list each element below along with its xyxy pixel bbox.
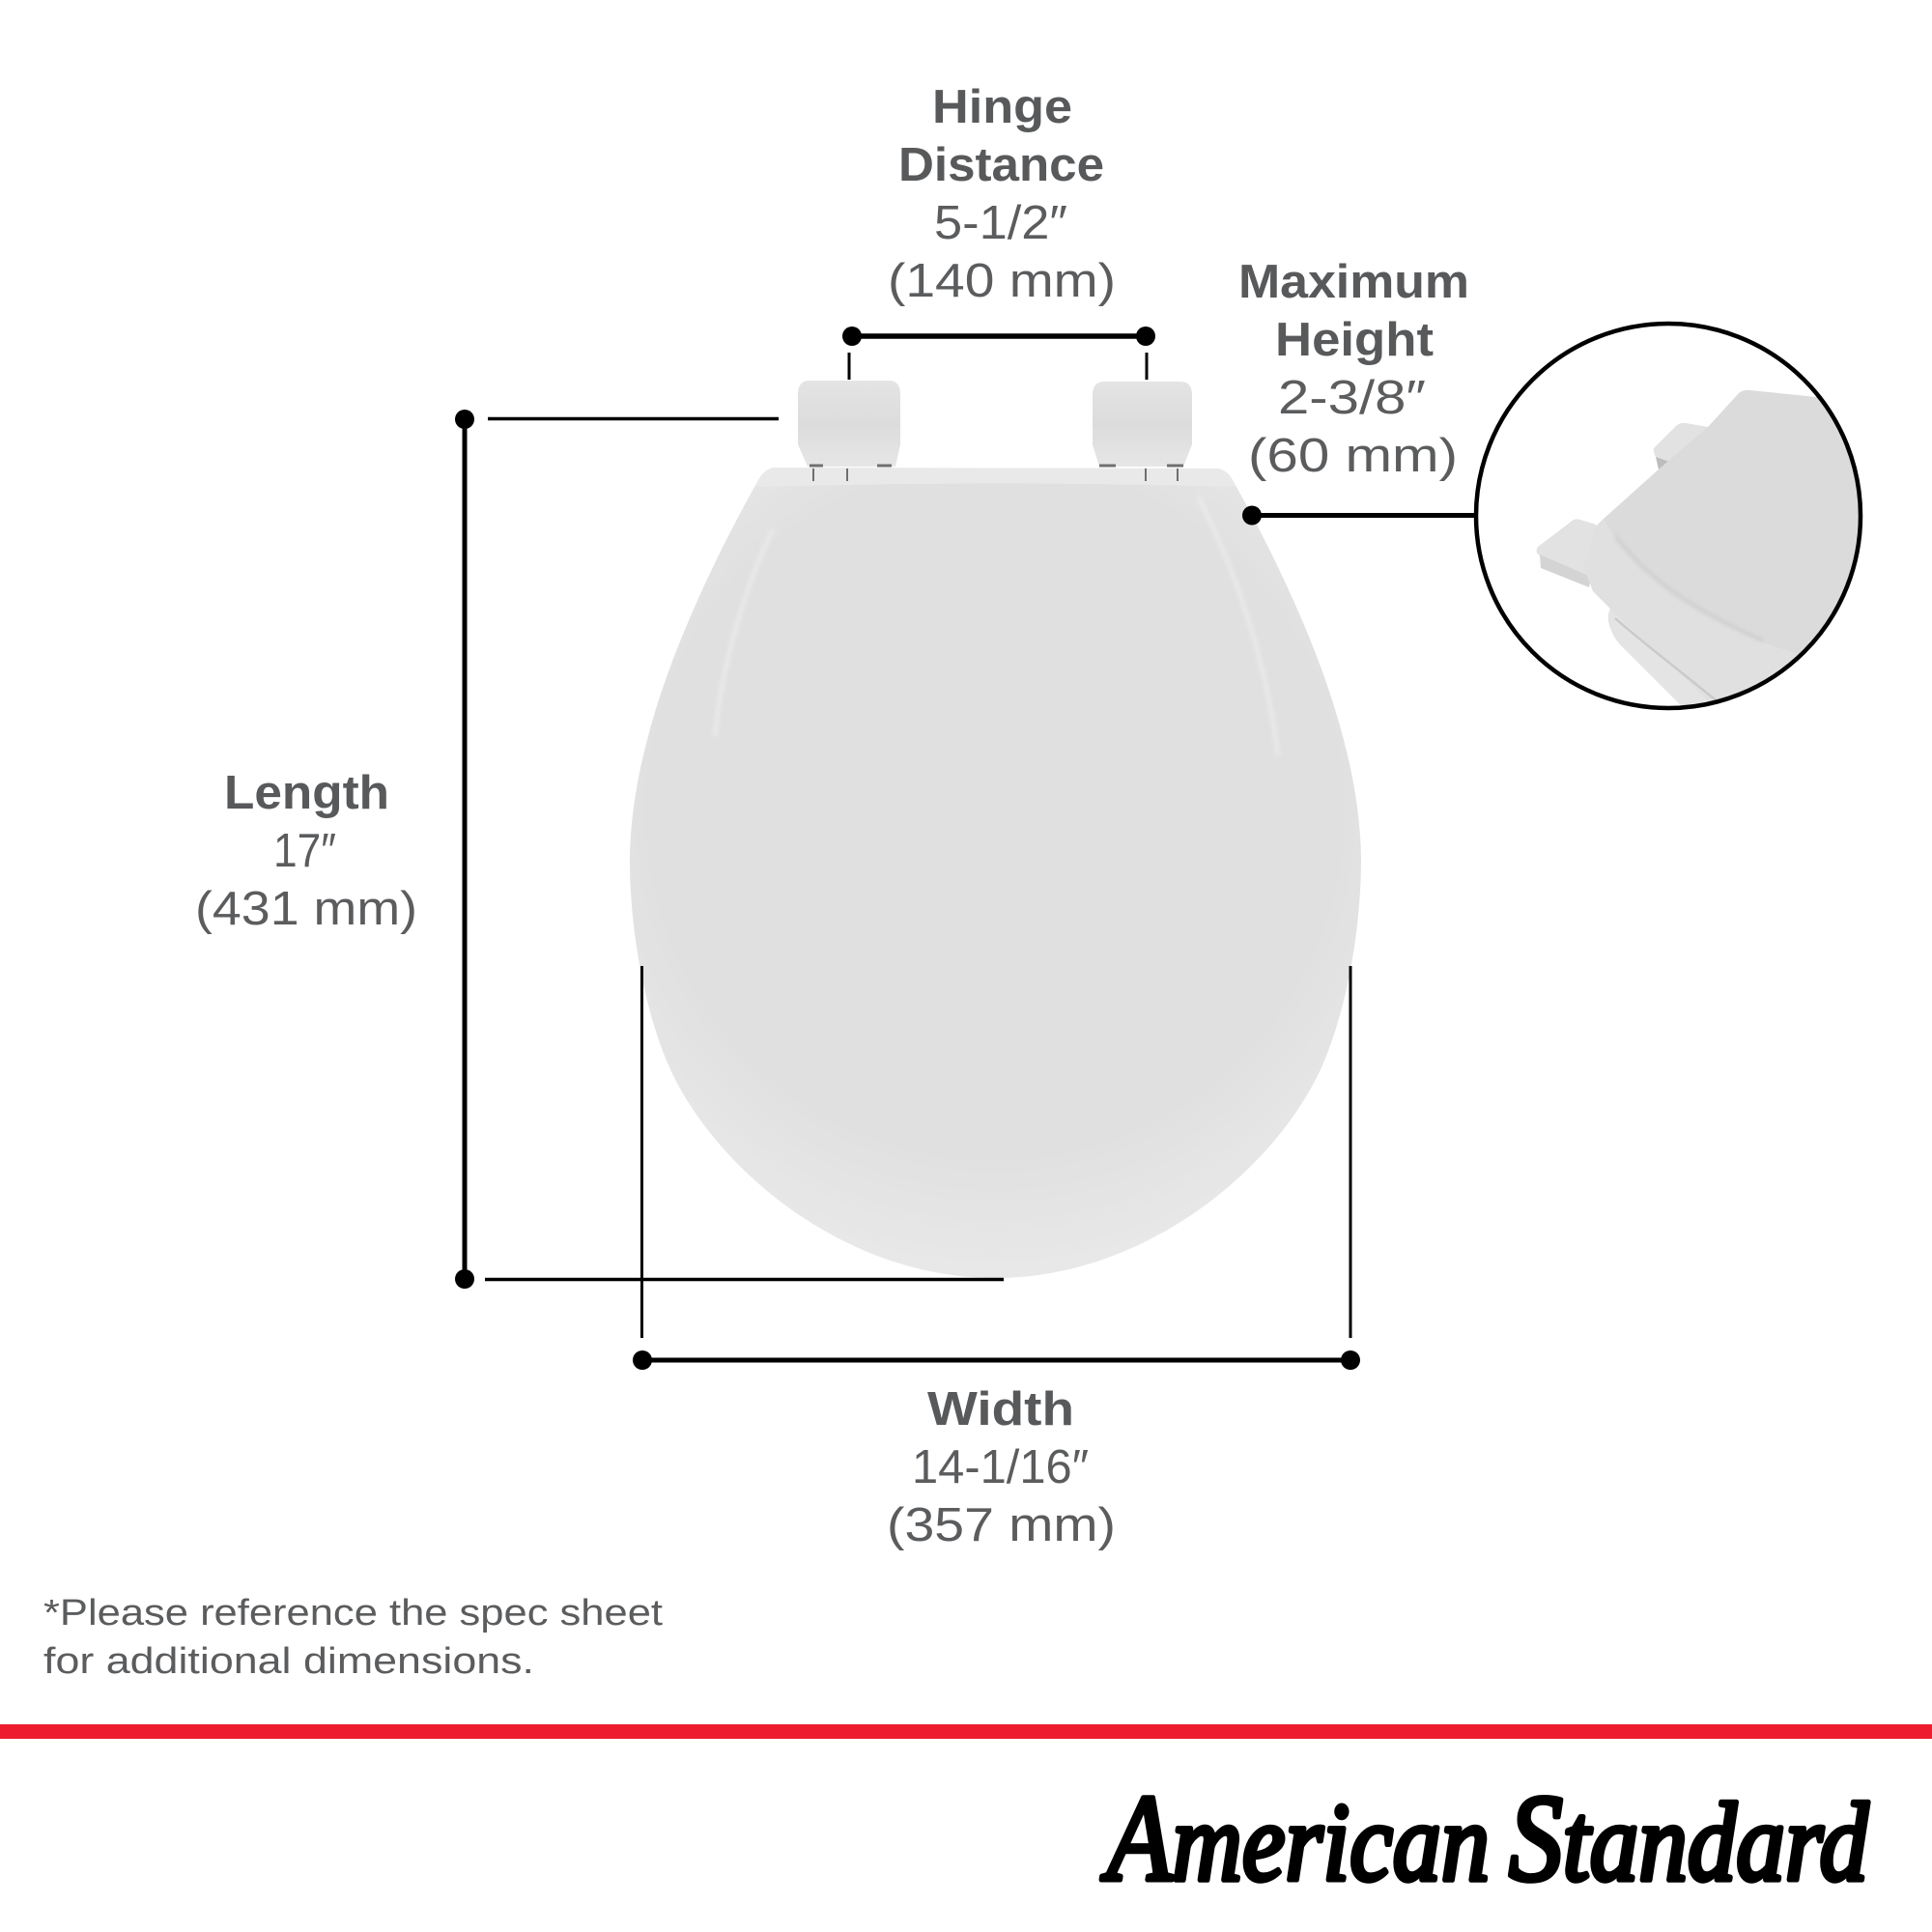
label: length: (431 mm): [195, 883, 417, 935]
seat rear band: [754, 468, 1236, 487]
inset front hinge: [1536, 519, 1596, 578]
seat moulded highlights: [715, 497, 1278, 755]
label: length: Length: [224, 767, 389, 819]
label: maximum height: 2-3/8″: [1278, 372, 1426, 424]
label: maximum height: Height: [1275, 314, 1434, 366]
brand logo: Standard: [1509, 1770, 1869, 1907]
width dimension line: [633, 966, 1360, 1370]
length dimension line: [455, 410, 1004, 1289]
label: maximum height: [1238, 256, 1469, 482]
label: width: Width: [927, 1383, 1074, 1435]
inset rear hinge: [1654, 423, 1708, 462]
label: width: 14-1/16″: [912, 1441, 1089, 1493]
red divider bar: [0, 1724, 1932, 1739]
maximum height leader line: [1242, 506, 1478, 526]
footnote: *Please reference the spec sheet: [43, 1593, 664, 1634]
label: maximum height: Maximum: [1238, 256, 1469, 308]
label: hinge distance: [888, 81, 1116, 307]
footnote: for additional dimensions.: [43, 1641, 534, 1682]
inset seat rim: [1584, 519, 1835, 753]
inset: side view of seat: [1474, 321, 1862, 711]
label: width: (357 mm): [887, 1499, 1116, 1551]
left hinge: [798, 381, 900, 467]
hinge details: [810, 466, 1183, 481]
inset seat lip: [1611, 632, 1619, 642]
label: length: [195, 767, 417, 935]
label: hinge distance: Hinge: [932, 81, 1072, 133]
label: hinge distance: 5-1/2″: [934, 197, 1067, 249]
brand logo: American: [1101, 1770, 1490, 1907]
hinge distance dimension line: [842, 327, 1155, 380]
label: maximum height: (60 mm): [1248, 430, 1458, 482]
inset seat grooves: [1615, 538, 1756, 638]
footnote: [43, 1593, 664, 1682]
right hinge: [1093, 382, 1192, 467]
toilet seat illustration: [630, 381, 1361, 1278]
label: width: [887, 1383, 1116, 1551]
label: length: 17″: [273, 825, 336, 877]
label: hinge distance: (140 mm): [888, 255, 1116, 307]
label: hinge distance: Distance: [898, 139, 1104, 191]
inset seat body: [1590, 390, 1859, 655]
seat lid: [630, 468, 1361, 1278]
brand logo: [1101, 1770, 1869, 1907]
